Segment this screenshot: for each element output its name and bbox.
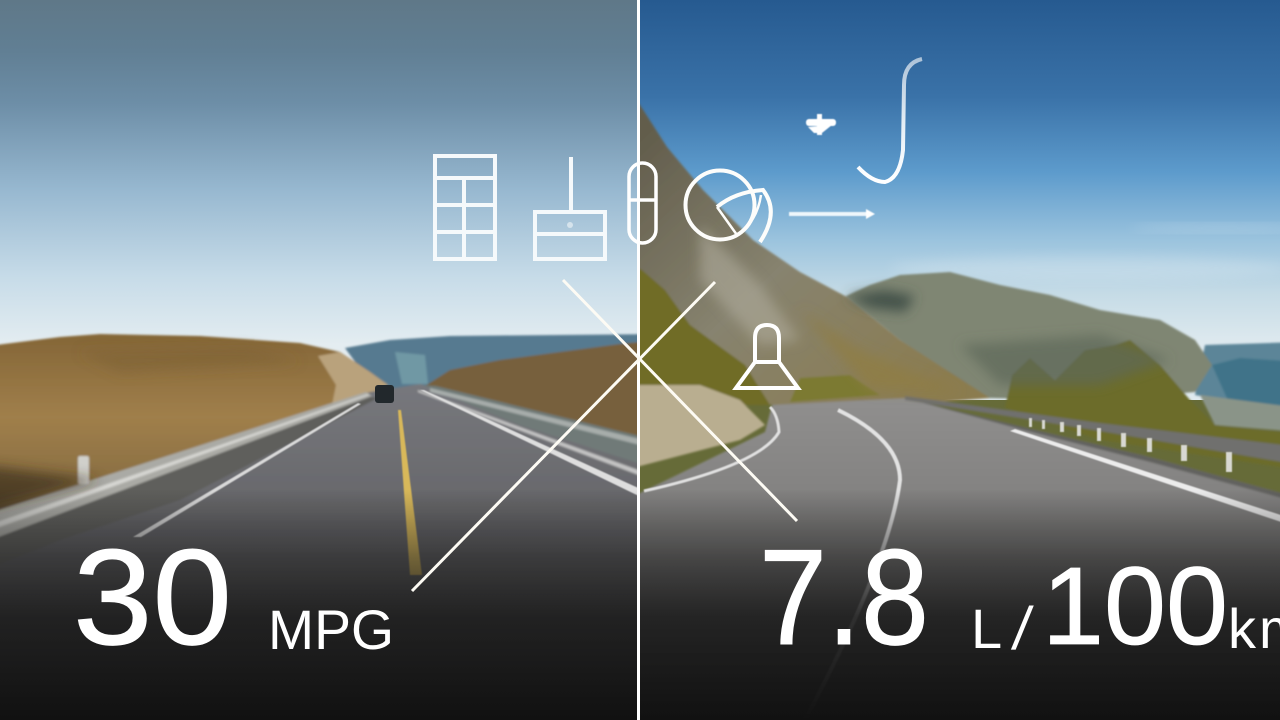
panel: left road scene	[0, 0, 637, 620]
metric: 7.8 L/100km: L	[971, 597, 1002, 660]
icon: hook curve	[858, 59, 922, 182]
cross lines	[412, 280, 797, 591]
icon: box with stem	[535, 157, 605, 259]
icon: circle and sector	[686, 170, 771, 242]
centre divider	[637, 0, 640, 720]
metric: 30 MPG: MPG	[268, 598, 394, 661]
metric: 7.8 L/100km	[759, 521, 1280, 673]
bottom dark gradient	[0, 490, 1280, 720]
metric: 30 MPG: 30	[73, 521, 232, 673]
icon: arrow	[789, 209, 875, 219]
icon: grid table	[435, 156, 495, 259]
icon: small plane	[806, 114, 836, 135]
metric: 30 MPG	[73, 521, 394, 673]
metric: 7.8 L/100km: 100	[1042, 545, 1228, 668]
panel: right road scene	[625, 0, 1280, 720]
icon: person pin	[736, 325, 798, 388]
metric: 7.8 L/100km: /	[1009, 594, 1036, 662]
metric: 7.8 L/100km: 7.8	[759, 521, 929, 673]
icon: capsule	[629, 163, 656, 243]
